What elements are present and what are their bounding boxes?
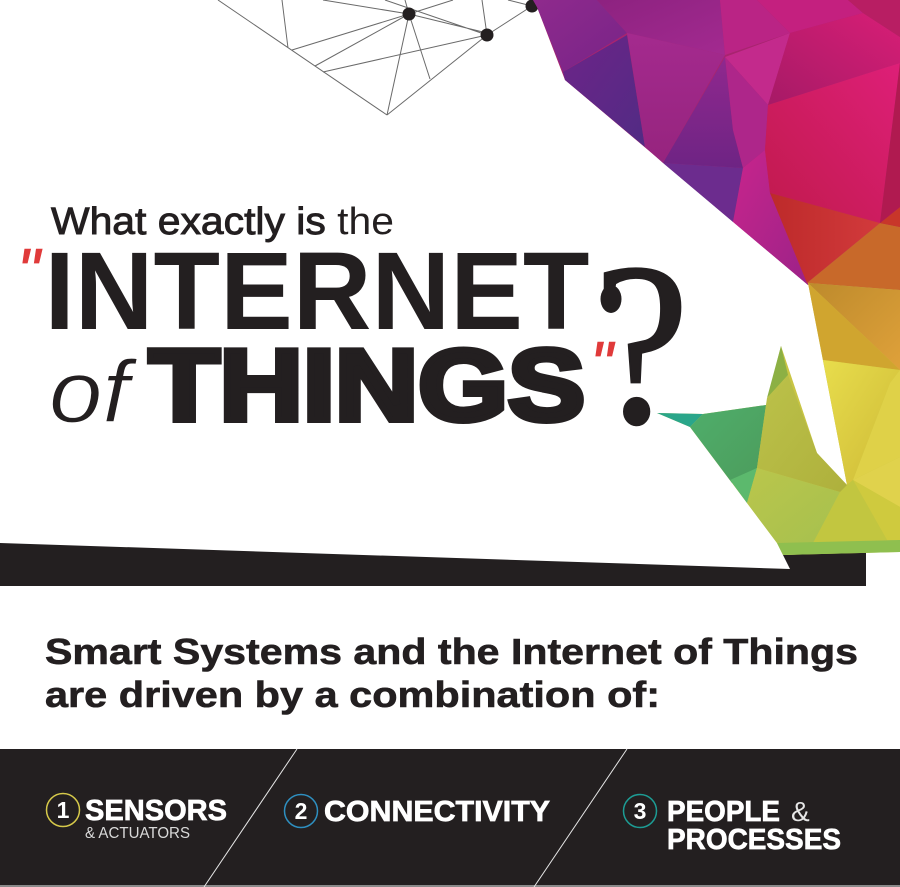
ampersand: & <box>791 796 810 827</box>
black ribbon under the white panel <box>0 543 866 586</box>
opening quote: " <box>17 235 43 307</box>
number badge 1: 1 <box>57 797 70 823</box>
title <box>17 201 689 473</box>
people label: PEOPLE <box>667 796 780 828</box>
polygon art: purple to red upper section <box>533 0 900 300</box>
dark band with three drivers <box>0 749 900 887</box>
subheading line one: Smart Systems and the Internet of Things <box>45 631 858 672</box>
actuators label: & ACTUATORS <box>85 825 190 842</box>
title line: what exactly is the: What exactly is the <box>51 201 394 243</box>
closing quote: " <box>590 328 616 400</box>
driver 2: connectivity <box>284 794 550 828</box>
number badge 1 <box>46 794 80 826</box>
node <box>526 0 538 12</box>
title word: of: of <box>49 342 138 441</box>
connectivity label: CONNECTIVITY <box>324 796 550 828</box>
subheading line two: are driven by a combination of: <box>45 674 660 715</box>
number badge 2: 2 <box>295 798 307 824</box>
network mesh illustration <box>218 0 538 115</box>
node <box>480 28 494 42</box>
subheading <box>45 631 858 715</box>
title word: things: THINGS <box>149 330 585 442</box>
title word: internet: INTERNET <box>44 230 590 353</box>
node <box>402 8 416 20</box>
number badge 3: 3 <box>634 798 646 824</box>
sensors label: SENSORS <box>85 795 227 827</box>
driver 1: sensors and actuators <box>46 794 227 842</box>
question mark: ? <box>593 216 689 473</box>
polygon art: yellow to green lower section <box>657 283 900 555</box>
number badge 2 <box>284 794 318 828</box>
number badge 3 <box>624 794 656 828</box>
processes label: PROCESSES <box>667 824 841 856</box>
driver 3: people and processes <box>624 794 841 856</box>
